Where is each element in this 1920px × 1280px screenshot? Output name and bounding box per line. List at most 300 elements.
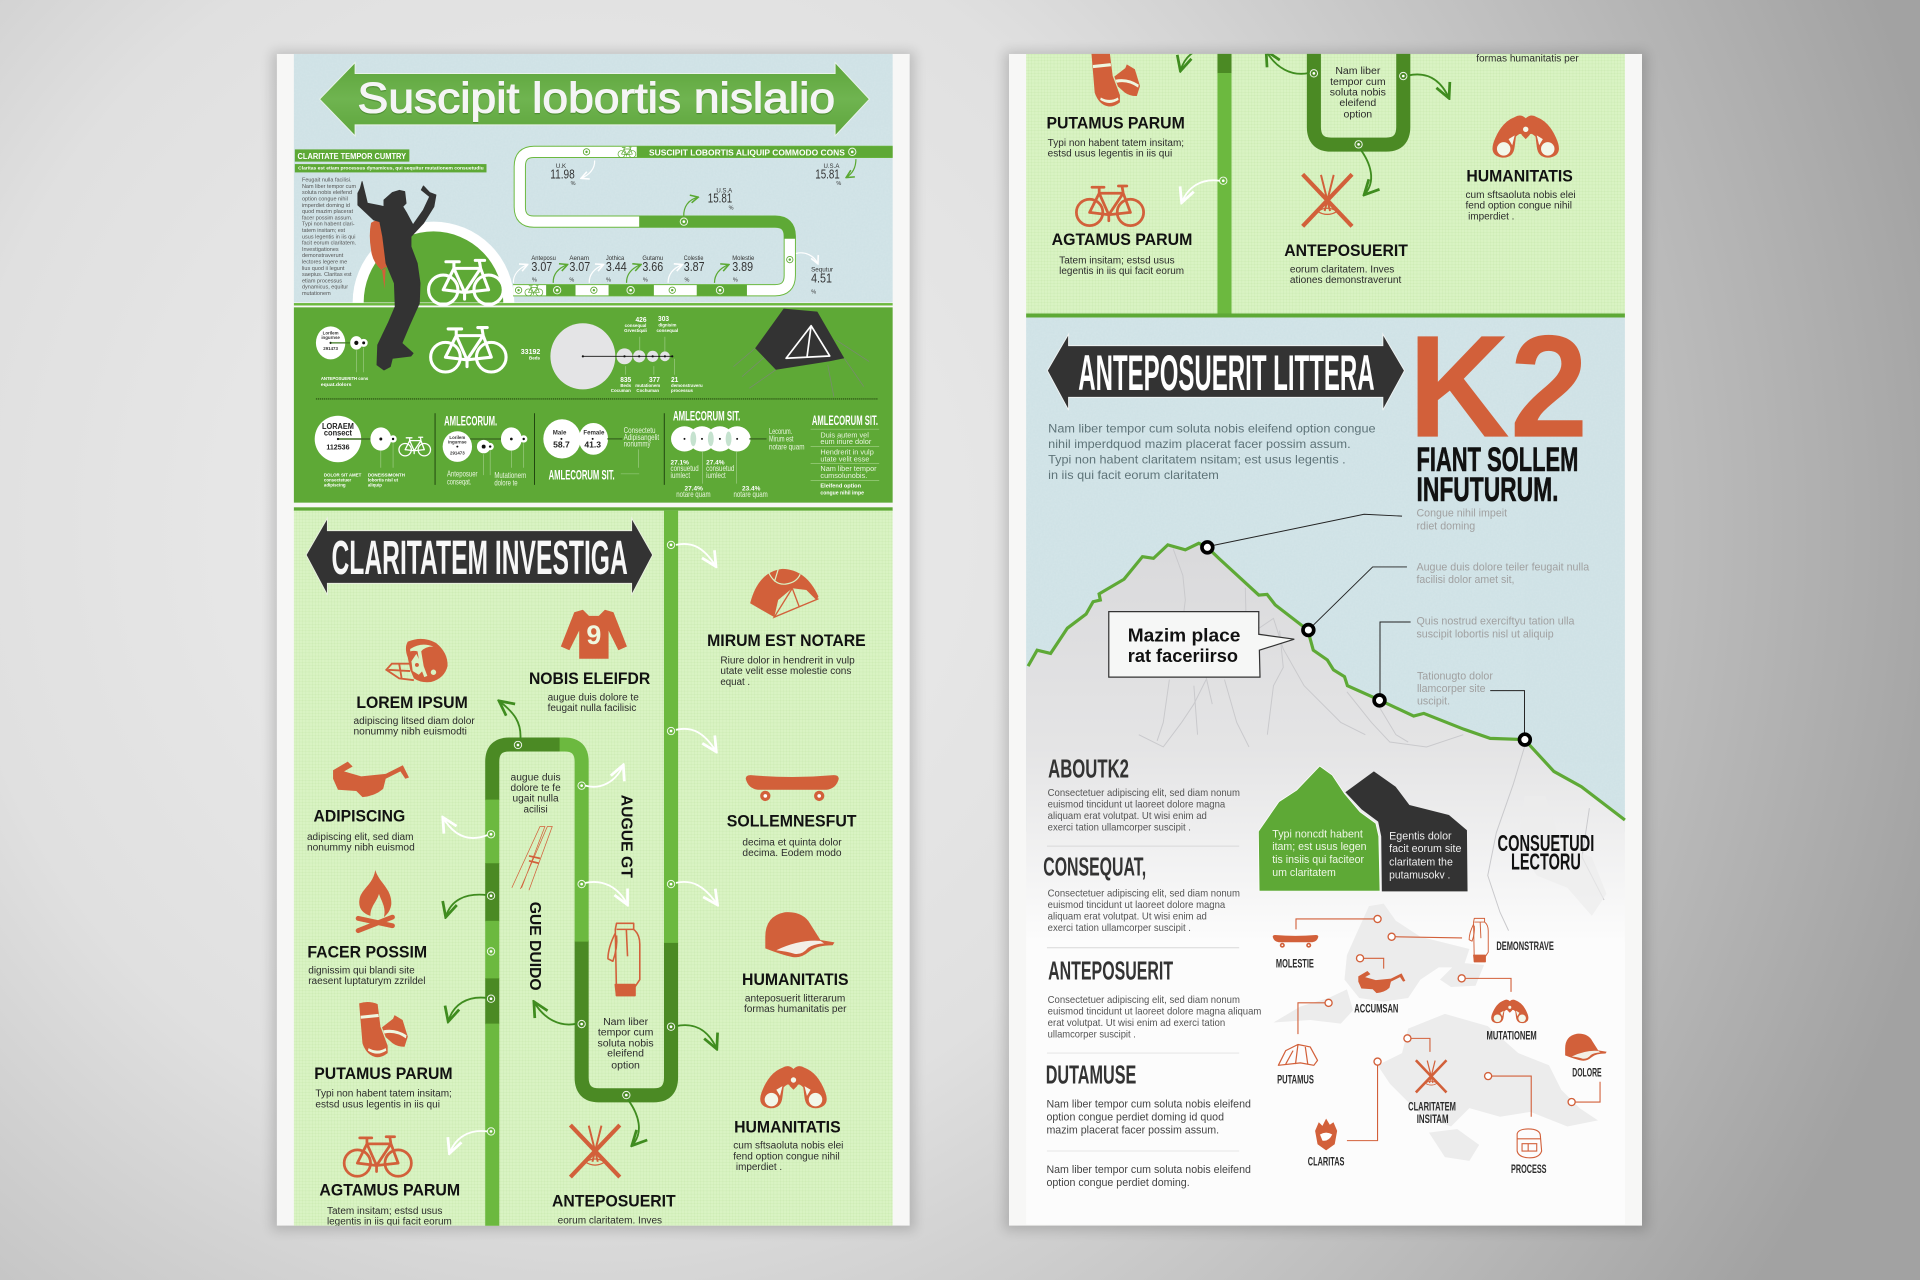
intro text column: mutationem [302,291,331,297]
stat: amlecorum sit list: Hendrerit in vulp [820,447,874,456]
item: mirum est notare: equat . [720,676,750,688]
item: humanitatis continued: cum sftsaoluta nobis elei [1465,189,1576,201]
route data labels: 3.07 [531,259,552,274]
track heading text: SUSCIPIT LOBORTIS ALIQUIP COMMODO CONS [649,148,845,158]
icon: crossed skis [1304,176,1351,225]
intro text column: demonstraverunt [302,253,344,259]
panel: sky header section [294,54,893,302]
stat: overlapping circles: 27.4% [706,460,725,467]
stat: overlapping circles: notare quam [769,442,804,451]
item: humanitatis binoculars [733,1066,843,1173]
stat: overlapping circles: 23.4% [742,485,761,492]
stat: loraem consect circles [315,416,431,488]
section tag: claritate tempor cumtry: CLARITATE TEMPOR CUMTRY [298,151,406,161]
stat: proportional circles: 835 [620,375,631,384]
route data labels: Sequtur [811,267,833,274]
route data labels: % [836,181,841,187]
panel: right page: llamcorper site [1417,683,1486,695]
leader lines to notes [1210,514,1524,737]
map item: demonstrave [1469,918,1554,962]
item: putamus parum continued: PUTAMUS PARUM [1046,114,1185,132]
label: consuetudi lectoru: LECTORU [1511,848,1581,874]
panel: left page [272,51,915,1265]
stat: overlapping circles: Mirum est [769,435,794,444]
item: humanitatis cap: HUMANITATIS [742,971,849,989]
panel: k2 sky section [1026,318,1625,832]
intro text column: dynamicus, equitur [302,285,348,291]
note: quis nostrud: Quis nostrud exerciftyu tation ulla [1416,615,1575,627]
text block: dutamuse [1046,1062,1251,1136]
stat: proportional circles: Cochuman [636,388,659,393]
route data labels: Gutamu [642,255,663,262]
inner track note: augue duis: acilisi [524,803,548,815]
inner track note: nam liber: soluta nobis [598,1037,654,1049]
item: nobis eleifdr: NOBIS ELEIFDR [529,670,651,688]
item: humanitatis binoculars: cum sftsaoluta nobis elei [733,1140,843,1152]
text block: anteposuerit: euismod tincidunt ut laoreet dolore magna aliquam [1048,1006,1261,1017]
item: anteposuerit continued: eorum claritatem. Inves [1290,264,1394,276]
title: Suscipit lobortis nislalio [358,75,835,123]
stat: amlecorum sit list: Eleifend option [820,484,862,490]
item: humanitatis cap: anteposuerit litterarum [745,993,845,1005]
peak cards: dark [1345,771,1468,891]
stat: amlecorum circles: 291473 [450,450,465,455]
map item: process: PROCESS [1511,1162,1547,1176]
dotted divider [316,398,878,400]
text block: dutamuse: option congue perdiet doming id quod [1046,1111,1224,1123]
route data labels: Molestie [732,255,755,262]
item: adipiscing: adipiscing elit, sed diam [307,831,414,843]
map item: process [1511,1129,1547,1176]
title arrow banner [320,62,869,136]
item: humanitatis binoculars: imperdiet . [736,1161,782,1173]
item: sollemnesfut: SOLLEMNESFUT [727,813,857,831]
map item: accumsan: ACCUMSAN [1354,1002,1398,1016]
stat: overlapping circles: 27.4% [684,485,703,492]
stat: male female circles: 58.7 [553,439,570,449]
panel: right page [1004,0,1647,1231]
text block: consequat: euismod tincidunt ut laoreet dolore magna [1048,900,1226,911]
inner track note: nam liber: option [611,1059,640,1071]
route waypoints [1202,542,1530,745]
item: anteposuerit: eorum claritatem. Inves [558,1214,662,1226]
stat: proportional circles: 33192 [521,347,540,356]
route data labels: U.K [556,163,566,170]
label: consuetudi lectoru [1498,830,1594,874]
stat: proportional circles: mutationem [635,383,660,388]
text block: dutamuse: DUTAMUSE [1046,1062,1136,1090]
icon: white bicycle [431,328,506,372]
route data labels: % [811,289,816,295]
stat: amlecorum sit list: AMLECORUM SIT. [812,413,878,428]
item: facer possim [307,870,427,987]
item: anteposuerit continued [1284,176,1408,286]
text block: consequat: aliquam erat volutpat. Ut wisi enim ad [1048,911,1207,922]
icon: bottle [608,923,640,996]
intro text column: tatem insitam; est [302,228,346,234]
text block: about k2: euismod tincidunt ut laoreet dolore magna [1048,800,1226,811]
stat: amlecorum sit list: Duis autem vel [820,431,869,440]
stat: proportional circles: 21 [671,375,678,384]
figure: hiker silhouette with backpack [358,182,436,370]
stat: male female circles: nonummy [624,440,651,449]
stat: small circles left: equat.dolors [321,382,352,387]
icon: boots [1091,51,1140,107]
item: putamus parum [314,1002,453,1110]
intro text column: lectores legere me [302,260,347,266]
world map background shapes [1273,796,1607,1161]
item: agtamus parum continued: Tatem insitam; estsd usus [1059,254,1175,266]
map item: claritatem insitam: CLARITATEM [1408,1100,1456,1114]
inner track note: nam liber: eleifend [607,1048,644,1060]
icon: jersey: 9 [586,620,601,650]
inner track note: augue duis: augue duis [510,772,561,784]
item: agtamus parum continued: AGTAMUS PARUM [1052,231,1192,249]
route data labels: 15.81 [815,166,840,181]
route arrows [513,159,856,283]
item: mirum est notare [707,569,866,688]
stat: small circles left [316,326,369,387]
text block: anteposuerit: Consectetuer adipiscing elit, sed diam nonum [1048,995,1240,1006]
route data labels: 3.07 [569,259,590,274]
stat: overlapping circles: iumlect [671,471,691,480]
item: facer possim: raesent luptaturym zzrildel [308,975,426,987]
peak cards: green [1258,766,1380,891]
stat: male female circles: Consectetu [624,426,655,435]
route data labels: % [733,278,738,284]
stat: small circles left: ingurnse [321,335,340,340]
map item: molestie [1273,935,1318,970]
heading banner: claritatem investiga [306,518,653,595]
stat: loraem consect circles: adipiscing [324,483,346,488]
heading banner: anteposuerit littera: ANTEPOSUERIT LITTERA [1078,345,1375,401]
stat: loraem consect circles: consectetuer [324,478,351,483]
note: augue duis: Augue duis dolore teiler feugait nulla [1416,561,1590,573]
route data labels: % [729,205,734,211]
stat: overlapping circles: consuetud [671,464,699,473]
stat: overlapping circles: 27.1% [671,460,689,467]
route data labels: Jothica [606,255,625,262]
icon: tent outline [1278,1044,1318,1065]
stat: amlecorum sit list: congue nihil impe [820,490,864,496]
intro paragraph: nihil imperdquod mazim placerat facer possim assum. [1048,437,1351,451]
callout: mazim place [1109,612,1294,677]
intro text column: Feugait nulla facilisi. [302,178,352,184]
stat: amlecorum circles: conseqat. [447,477,471,486]
item: humanitatis cap [742,912,849,1015]
panel: right page: suscipit lobortis nisl ut aliquip [1416,628,1554,640]
map item: mutationem: MUTATIONEM [1487,1029,1537,1043]
stat: proportional circles: Beds [620,383,632,388]
text block: anteposuerit: ANTEPOSUERIT [1048,958,1173,986]
item: anteposuerit: ANTEPOSUERIT [552,1193,676,1211]
route data labels: Colestie [684,255,704,262]
route data labels: U.S.A [823,163,840,170]
stat: proportional circles: 426 [636,315,647,324]
item: anteposuerit [552,1127,676,1226]
intro paragraph [1048,422,1376,482]
item: sollemnesfut [727,775,857,859]
icon: skis outline [512,827,552,890]
panel: right page: rdiet doming [1416,520,1475,532]
inner track note continued: option [1344,109,1372,121]
item: mirum est notare: utate velit esse molestie cons [720,665,851,677]
stat: loraem consect circles: lobortis nisl ut [368,478,399,483]
intro text column: saepius. Claritas est [302,272,352,278]
item: humanitatis continued: imperdiet . [1468,210,1514,222]
stat: amlecorum circles: Anteposuer [447,469,478,478]
text: formas humanitatis per: formas humanitatis per [1476,52,1579,64]
item: putamus parum continued: estsd usus legentis in iis qui [1048,148,1172,160]
inner track note continued: soluta nobis [1330,87,1386,99]
item: humanitatis continued: fend option congue nihil [1465,200,1572,212]
map item: dolore: DOLORE [1572,1065,1602,1079]
item: putamus parum: Typi non habent tatem insitam; [315,1088,452,1100]
text block: anteposuerit: erat volutpat. Ut wisi enim ad exerci tation [1048,1018,1225,1029]
intro text column: Nam liber tempor cum [302,184,356,190]
item: putamus parum continued [1046,51,1185,160]
stat: amlecorum sit list: eum iriure dolor [820,437,872,446]
icon: helmet [386,639,448,682]
item: humanitatis cap: formas humanitatis per [744,1003,847,1015]
stat: loraem consect circles: LORAEM [322,421,354,431]
icon: backpack [1517,1129,1542,1158]
callout: mazim place: Mazim place [1128,625,1240,646]
stat: male female circles: 41.3 [584,439,601,449]
stat: proportional circles [521,314,703,393]
map item: putamus: PUTAMUS [1277,1073,1314,1087]
icon: campfire [358,870,392,931]
item: lorem ipsum: nonummy nibh euismodti [354,725,467,737]
item: agtamus parum continued [1052,186,1192,277]
icon: crossed skis [572,1127,618,1176]
stat: loraem consect circles: consect [324,429,352,438]
heading banner: claritatem investiga: CLARITATEM INVESTIGA [331,531,628,585]
icon: white bicycle in arch [429,260,503,304]
text block: dutamuse: mazim placerat facer possim assum. [1046,1124,1219,1136]
icon: sunglasses [333,762,409,797]
connector track continued [1175,0,1450,314]
arch with bicycle [353,222,514,304]
item: lorem ipsum: adipiscing litsed diam dolor [354,715,475,727]
item: mirum est notare: Riure dolor in hendrerit in vulp [720,654,855,666]
subheading: fiant sollem infuturum [1416,441,1578,509]
vertical label: gue duido: GUE DUIDO [526,902,543,991]
inner track note: nam liber: tempor cum [598,1027,654,1039]
stat: proportional circles: 303 [658,314,669,323]
text block: nam liber tempor [1046,1164,1251,1189]
text block: consequat: CONSEQUAT, [1043,854,1146,882]
item: humanitatis continued: HUMANITATIS [1466,168,1573,186]
item: lorem ipsum [354,639,475,737]
peak cards: green: um claritatem [1272,867,1336,879]
intro text column: lius quod ii legunt [302,266,345,272]
map item: claritas: CLARITAS [1308,1155,1344,1169]
intro text column: Investigationes [302,247,339,253]
map item: claritatem insitam [1408,1061,1456,1126]
text block: consequat: exerci tation ullamcorper suscipit . [1048,923,1191,934]
stat: proportional circles: consequal [656,328,678,333]
intro paragraph: in iis qui facit eorum claritatem [1048,468,1219,482]
route ridge line [1028,543,1625,820]
item: lorem ipsum: LOREM IPSUM [356,694,468,712]
icon: dark tent with guy lines [733,309,869,397]
route data labels: % [643,278,648,284]
peak cards: green: itam; est usus legen [1272,841,1367,853]
stat: amlecorum circles: ingurnse [448,439,467,444]
text block: dutamuse: Nam liber tempor cum soluta nobis eleifend [1046,1099,1251,1111]
panel: continued activities section [1026,54,1625,313]
stat: amlecorum circles: Lorilem [449,435,465,440]
section subtitle tag [295,164,486,172]
stat: male female circles: AMLECORUM SIT. [549,467,615,482]
stat: overlapping circles [671,409,804,499]
stat: male female circles: Male [553,430,567,437]
inner track note continued: Nam liber [1335,65,1381,77]
stat: amlecorum circles [443,414,527,488]
text block: about k2 [1048,756,1240,834]
icon: cap [765,912,834,957]
winding route track [513,147,893,296]
stat: amlecorum circles: Mutationem [494,471,526,480]
item: humanitatis binoculars: fend option congue nihil [733,1150,840,1162]
peak cards: dark: facit eorum site [1389,843,1461,855]
panel: green statistics section [294,307,893,503]
map item: molestie: MOLESTIE [1276,956,1314,970]
item: putamus parum: estsd usus legentis in iis qui [315,1098,440,1110]
stat: small circles left: 291473 [323,346,338,351]
stat: loraem consect circles: DOLOR SIT AMET [324,473,362,478]
intro text column: quod mazim placerat [302,209,353,215]
icon: small fire [1315,1119,1337,1150]
item: mirum est notare: MIRUM EST NOTARE [707,632,866,650]
route data labels: % [571,181,576,187]
route data labels: % [606,278,611,284]
map item: demonstrave: DEMONSTRAVE [1496,939,1554,953]
route data labels [531,163,841,295]
map item: mutationem [1487,1000,1537,1043]
subheading: fiant sollem infuturum: INFUTURUM. [1416,471,1559,509]
stat: proportional circles: consequal [625,323,646,328]
map item: accumsan [1354,971,1405,1016]
icon: binoculars [1492,115,1559,158]
item: nobis eleifdr: feugait nulla facilisic [548,702,636,714]
mountain illustration [1026,543,1625,1224]
text block: about k2: ABOUTK2 [1048,756,1129,784]
stat: loraem consect circles: aliquip [368,483,382,488]
stat: overlapping circles: Lecorum. [769,427,792,436]
intro text column: option congue nihil [302,197,348,203]
map leader lines [1296,915,1600,1141]
item: nobis eleifdr [529,610,651,714]
subheading: fiant sollem infuturum: FIANT SOLLEM [1416,441,1578,479]
route data labels: 3.44 [606,259,627,274]
item: sollemnesfut: decima. Eodem modo [742,847,842,859]
stat: small circles left: ANTEPOSUERITH cons [321,376,369,381]
icon: orange bicycle [1076,186,1144,226]
intro text column: soluta nobis eleifend [302,190,352,196]
route data labels: % [569,278,574,284]
stat: amlecorum sit list: Nam liber tempor [820,464,877,473]
peak cards: green: Typi noncdt habent [1272,829,1363,841]
text block: about k2: aliquam erat volutpat. Ut wisi enim ad [1048,811,1207,822]
intro text column: imperdiet doming id [302,203,350,209]
stat: proportional circles: Cocuman [611,388,631,393]
item: adipiscing: nonummy nibh euismod [307,842,415,854]
route data labels: U.S.A [716,188,733,195]
item: putamus parum continued: Typi non habent tatem insitam; [1048,137,1184,149]
item: humanitatis continued [1465,115,1576,222]
stat: overlapping circles: AMLECORUM SIT. [673,409,740,424]
note: congue nihil: Congue nihil impeit [1416,508,1508,520]
text block: about k2: Consectetuer adipiscing elit, sed diam nonum [1048,788,1240,799]
intro paragraph: Nam liber tempor cum soluta nobis eleifend option congue [1048,422,1376,436]
stat: amlecorum sit list: cumsolunobis. [820,471,867,480]
panel: light green activities section [294,511,893,1226]
big heading: k2: K2 [1408,305,1588,468]
text block: nam liber tempor: option congue perdiet doming. [1046,1177,1190,1189]
connector track [443,511,718,1265]
stat: male female circles [543,419,660,482]
map item: claritas [1308,1119,1344,1169]
map item: claritatem insitam: INSITAM [1417,1112,1449,1126]
item: sollemnesfut: decima et quinta dolor [742,836,842,848]
item: humanitatis binoculars: HUMANITATIS [734,1118,841,1136]
text block: anteposuerit [1048,958,1261,1041]
route data labels: % [684,278,689,284]
inner track note continued: tempor cum [1330,76,1386,88]
panel: right page: facilisi dolor amet sit, [1416,574,1514,586]
inner track note: augue duis: ugait nulla [513,793,559,805]
item: agtamus parum [319,1137,460,1227]
stat: male female circles: Female [583,430,605,437]
route data labels: 11.98 [550,166,575,181]
mountain veins [1139,549,1604,931]
item: agtamus parum: AGTAMUS PARUM [319,1182,460,1200]
route data labels: % [532,278,537,284]
intro text column: usus legentis in iis qui [302,234,355,240]
heading banner: anteposuerit littera [1047,334,1404,410]
item: adipiscing [307,762,415,854]
stat: proportional circles: processus [671,388,694,393]
stat: proportional circles: 377 [649,375,660,384]
icon: boots [359,1002,408,1057]
icon: orange bicycle [344,1137,411,1176]
stat: proportional circles: dignisim [658,322,676,327]
stat: loraem consect circles: DONEISSIMONTH [368,473,405,478]
text block: anteposuerit: ullamcorper suscipit . [1048,1030,1136,1041]
icon: tent [750,569,818,617]
intro text column: Typi non habent clari- [302,222,355,228]
item: anteposuerit continued: ationes demonstraverunt [1290,274,1401,286]
text block: about k2: exerci tation ullamcorper suscipit . [1048,823,1191,834]
route data labels: 3.66 [642,259,663,274]
stat: male female circles: Adipisangelit [624,433,660,442]
route data labels: Anteposu [531,255,556,262]
route data labels: 3.89 [732,259,753,274]
vertical label: augue gt: AUGUE GT [618,795,635,879]
intro text column: facer possim assum. [302,215,353,221]
item: facer possim: FACER POSSIM [307,943,427,961]
item: nobis eleifdr: augue duis dolore te [548,691,639,703]
text block: nam liber tempor: Nam liber tempor cum soluta nobis eleifend [1046,1164,1251,1176]
peak cards: dark: Egentis dolor [1389,830,1452,842]
stat: proportional circles: Grvestiqali [624,328,647,333]
item: anteposuerit continued: ANTEPOSUERIT [1284,242,1408,260]
peak cards: green: tis insiis qui faciteor [1272,854,1364,866]
inner track note: nam liber: Nam liber [603,1016,649,1028]
stat: loraem consect circles: 112536 [326,442,350,451]
